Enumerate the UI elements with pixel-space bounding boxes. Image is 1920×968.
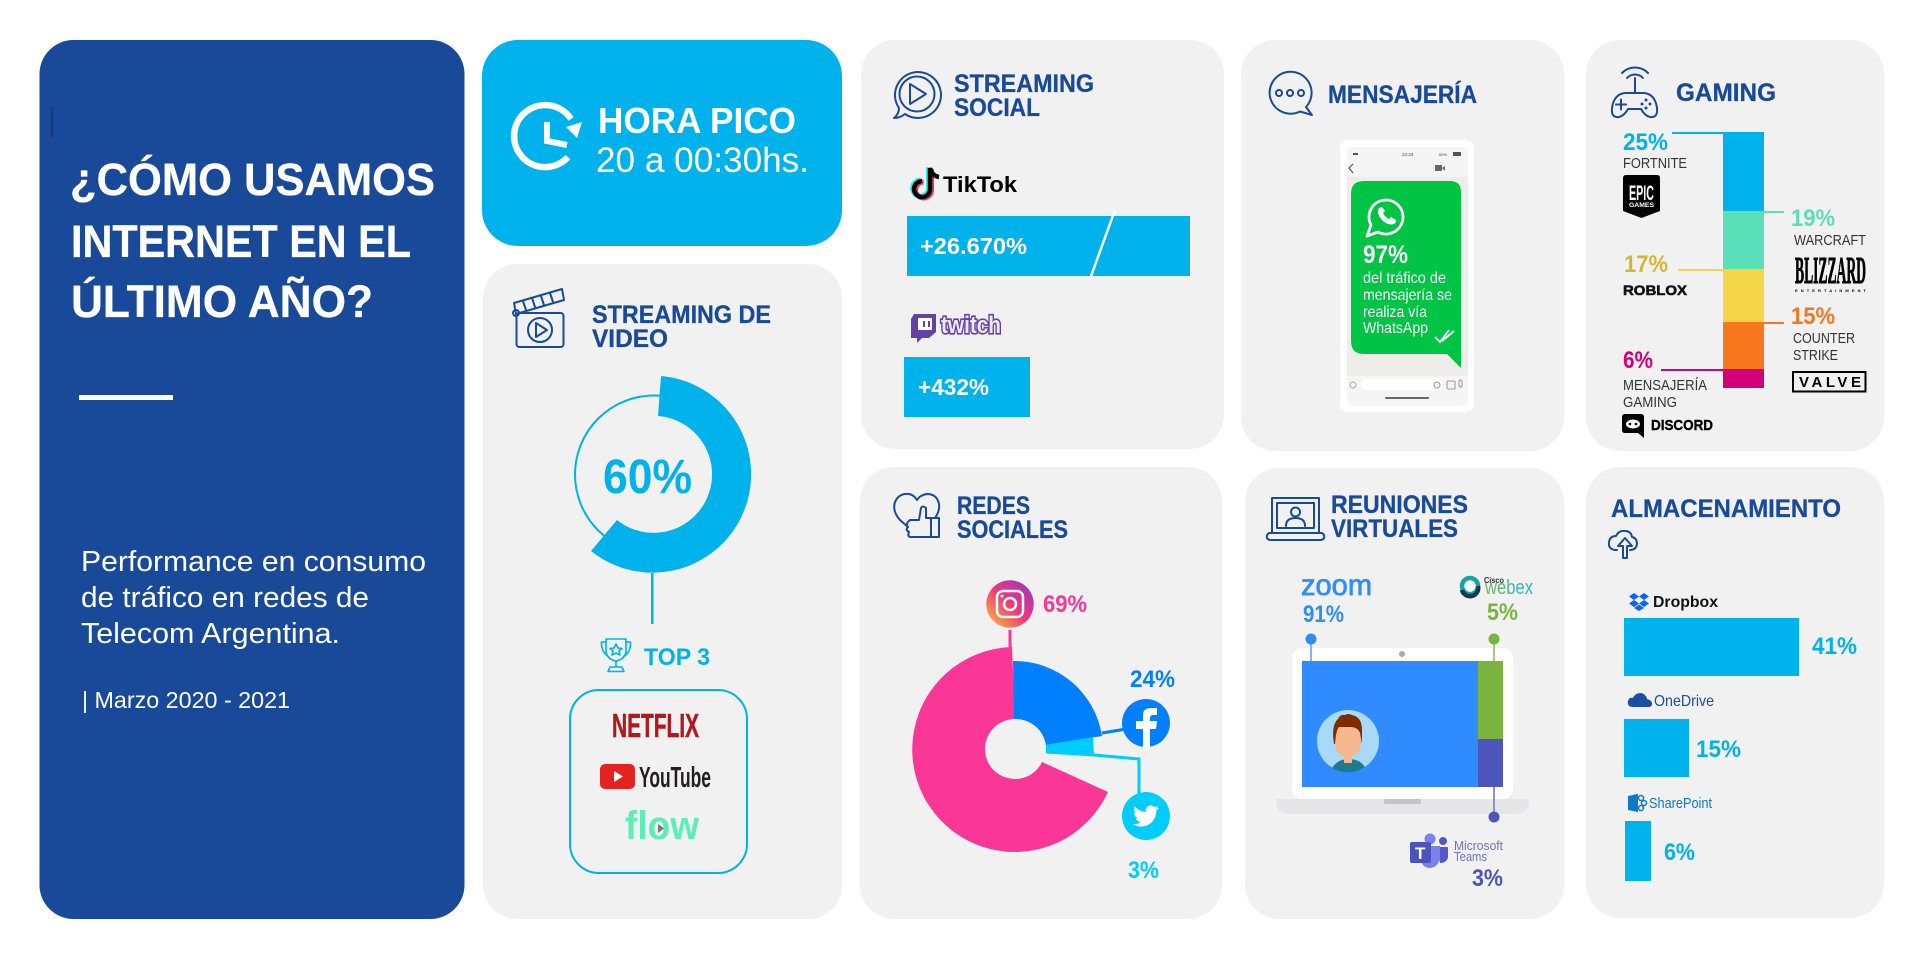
- label: roblox 17%: [1623, 251, 1688, 298]
- panel: mensajería: [1241, 40, 1564, 451]
- description: Telecom Argentina.: [81, 618, 340, 650]
- label: counter strike 15%: [1791, 303, 1866, 392]
- heading: [1331, 491, 1468, 543]
- donut chart 60%: [575, 376, 751, 573]
- phone mockup: 22:33: [1402, 152, 1414, 157]
- logo: youtube: [600, 762, 711, 794]
- icon: instagram: [986, 580, 1034, 628]
- label: warcraft 19%: [1791, 205, 1867, 293]
- icon: game controller: [1612, 67, 1657, 117]
- logo: tiktok: TikTok: [943, 172, 1018, 197]
- heading: SOCIAL: [954, 94, 1040, 122]
- label: webex 5%: [1462, 576, 1533, 626]
- panel: redes sociales: [860, 467, 1222, 919]
- bar: tiktok: +26.670%: [920, 233, 1027, 259]
- label: 3%: 3%: [1128, 857, 1159, 884]
- heading: VIDEO: [592, 325, 668, 353]
- bar: tiktok: [907, 210, 1190, 279]
- heading: REDES: [957, 492, 1030, 520]
- panel: almacenamiento: [1586, 467, 1884, 918]
- connector dots: [1306, 634, 1500, 822]
- logo: flow: flow: [625, 804, 700, 848]
- label: mensajería gaming 6%: 6%: [1623, 347, 1653, 374]
- whatsapp message bubble: del tráfico de: [1363, 270, 1446, 287]
- bar: sharepoint: [1625, 821, 1651, 881]
- title: ¿CÓMO USAMOS: [70, 154, 435, 205]
- bar: twitch: +432%: [918, 374, 989, 400]
- label: fortnite 25%: FORTNITE: [1623, 155, 1687, 172]
- logo: netflix: NETFLIX: [612, 707, 699, 744]
- label: mensajería gaming 6%: [1622, 347, 1713, 438]
- whatsapp message bubble: 97%: [1363, 241, 1408, 269]
- phone mockup: 60%: [1439, 152, 1447, 157]
- label: microsoft teams 3%: [1410, 834, 1503, 892]
- bar: onedrive: [1624, 719, 1689, 777]
- logo: sharepoint: SharePoint: [1649, 795, 1713, 812]
- heading: MENSAJERÍA: [1328, 80, 1477, 109]
- label: mensajería gaming 6%: GAMING: [1623, 394, 1677, 411]
- icon: heart with thumb: [894, 494, 939, 537]
- logo: dropbox: Dropbox: [1653, 594, 1718, 611]
- time range: 20 a 00:30hs.: [596, 141, 809, 180]
- label: fortnite 25%: [1623, 129, 1687, 218]
- label: microsoft teams 3%: T: [1415, 844, 1426, 863]
- label: microsoft teams 3%: Teams: [1454, 849, 1487, 864]
- heading: [957, 492, 1068, 544]
- heading: [592, 301, 771, 353]
- heading: SOCIALES: [957, 516, 1068, 544]
- heading: [954, 70, 1094, 122]
- label: 24%: 24%: [1130, 666, 1175, 693]
- label: zoom 91%: 91%: [1303, 601, 1344, 628]
- logo: youtube: YouTube: [639, 762, 711, 794]
- label: fortnite 25%: 25%: [1623, 129, 1668, 156]
- bar: dropbox: [1624, 618, 1799, 676]
- phone mockup: [1340, 140, 1474, 412]
- label: counter strike 15%: COUNTER: [1793, 330, 1855, 347]
- icon: twitter: [1122, 792, 1170, 840]
- logo: sharepoint: [1628, 794, 1713, 812]
- heading: STREAMING: [954, 70, 1094, 98]
- heading: ALMACENAMIENTO: [1611, 495, 1841, 523]
- label: microsoft teams 3%: 3%: [1472, 865, 1503, 892]
- heading: HORA PICO: [598, 100, 796, 141]
- value: dropbox: 41%: [1812, 633, 1857, 660]
- bar: twitch: [904, 357, 1030, 417]
- value: onedrive: 15%: [1696, 736, 1741, 763]
- logo: tiktok: [912, 167, 1018, 198]
- title: [70, 154, 435, 327]
- whatsapp message bubble: WhatsApp: [1363, 320, 1428, 337]
- description: [81, 546, 426, 650]
- icon: trophy: [601, 639, 631, 672]
- label: roblox 17%: ROBLOX: [1623, 282, 1688, 298]
- panel: intro: [40, 40, 464, 919]
- logo: epic games: [1623, 175, 1660, 218]
- icon: clapperboard: [513, 289, 564, 347]
- whatsapp message bubble: [1351, 181, 1461, 368]
- label: roblox 17%: 17%: [1624, 251, 1668, 278]
- icon: play bubble: [894, 72, 941, 118]
- logo: onedrive: OneDrive: [1654, 693, 1714, 710]
- icon: chat bubble: [1270, 72, 1312, 115]
- label: 69%: 69%: [1043, 591, 1087, 618]
- label: zoom 91%: zoom: [1301, 569, 1372, 602]
- laptop illustration: [1276, 634, 1529, 822]
- panel: hora pico: [482, 40, 842, 246]
- icon: clock: [514, 105, 582, 167]
- logo: valve: VALVE: [1799, 374, 1861, 391]
- logo: epic games: GAMES: [1629, 203, 1654, 209]
- title: INTERNET EN EL: [71, 216, 411, 267]
- logo: epic games: EPIC: [1629, 182, 1654, 205]
- title: ÚLTIMO AÑO?: [71, 276, 373, 327]
- whatsapp message bubble: mensajería se: [1363, 287, 1452, 304]
- description: Performance en consumo: [81, 546, 426, 578]
- logo: blizzard: ENTERTAINMENT: [1795, 288, 1867, 293]
- panel: reuniones virtuales: [1245, 468, 1564, 919]
- donut chart 60%: 60%: [603, 451, 692, 504]
- panel: streaming de video: [483, 264, 842, 919]
- icon: cloud upload: [1609, 531, 1637, 558]
- label: webex 5%: 5%: [1487, 599, 1518, 626]
- stacked bar: [1661, 132, 1784, 388]
- label: webex 5%: Cisco: [1484, 576, 1504, 585]
- label: warcraft 19%: 19%: [1791, 205, 1835, 232]
- whatsapp message bubble: realiza vía: [1363, 304, 1427, 321]
- avatar: [1317, 710, 1379, 772]
- label: microsoft teams 3%: Microsoft: [1454, 838, 1503, 853]
- top 3 label: TOP 3: [644, 644, 710, 671]
- date range: | Marzo 2020 - 2021: [82, 687, 290, 713]
- pie chart: [912, 630, 1139, 852]
- icon: whatsapp: [1367, 200, 1403, 236]
- label: webex 5%: webex: [1484, 577, 1533, 599]
- label: zoom 91%: [1301, 569, 1372, 628]
- label: warcraft 19%: WARCRAFT: [1794, 232, 1866, 249]
- panel: gaming: [1586, 40, 1884, 451]
- label: mensajería gaming 6%: MENSAJERÍA: [1623, 377, 1707, 394]
- panel: streaming social: [861, 40, 1224, 449]
- heading: GAMING: [1676, 79, 1776, 107]
- label: counter strike 15%: STRIKE: [1793, 347, 1838, 364]
- value: sharepoint: 6%: [1664, 839, 1695, 866]
- heading: VIRTUALES: [1331, 515, 1458, 543]
- label: counter strike 15%: 15%: [1791, 303, 1835, 330]
- logo: twitch: [911, 312, 1001, 343]
- heading: REUNIONES: [1331, 491, 1468, 519]
- logo: blizzard: [1795, 250, 1867, 293]
- description: de tráfico en redes de: [81, 582, 369, 614]
- top 3 box: [570, 690, 747, 873]
- logo: dropbox: [1629, 593, 1718, 611]
- icon: facebook: [1122, 699, 1170, 747]
- logo: onedrive: [1628, 693, 1714, 710]
- logo: discord: DISCORD: [1651, 417, 1713, 434]
- logo: twitch: twitch: [941, 312, 1001, 339]
- icon: laptop with user: [1267, 498, 1324, 540]
- heading: STREAMING DE: [592, 301, 771, 329]
